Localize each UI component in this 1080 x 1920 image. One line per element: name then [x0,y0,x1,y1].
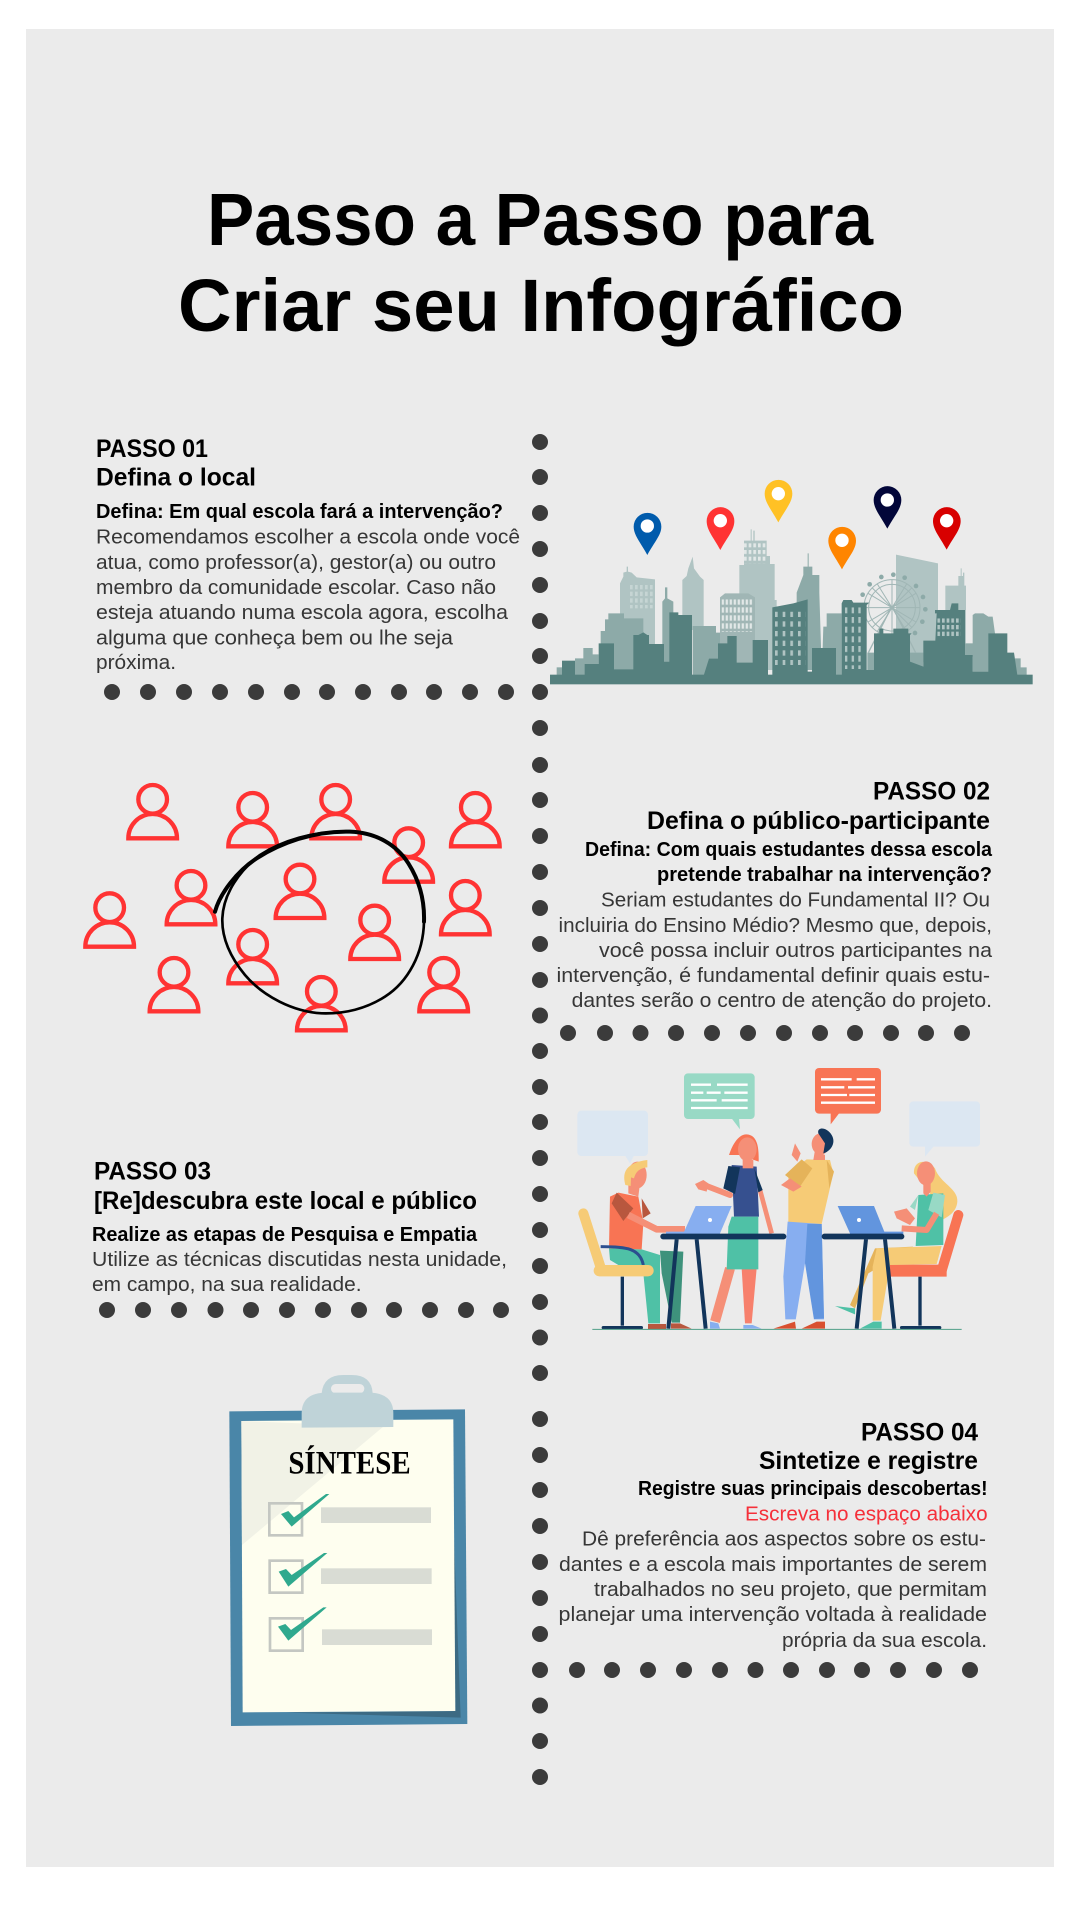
checklist item 2 [270,1553,432,1593]
panel: passo 02 text: Defina: Com quais estudantes dessa escola [585,839,993,861]
panel: passo 01 text: atua, como professor(a), gestor(a) ou outro [96,552,496,574]
panel: passo 04 text: Dê preferência aos aspectos sobre os estu- [582,1529,986,1551]
panel: passo 01 text: membro da comunidade escolar. Caso não [96,577,496,599]
table with laptops [660,1206,904,1329]
checklist item 3 [270,1607,432,1651]
title: Passo a Passo para [207,178,874,261]
panel: passo 04 text: própria da sua escola. [782,1630,987,1652]
skyline middle layer [557,587,1027,679]
panel: passo 03 text: em campo, na sua realidade. [92,1274,362,1296]
map pin: blue [634,513,661,555]
checklist item 1 [269,1494,431,1535]
panel: passo 04 text: Sintetize e registre [759,1447,978,1475]
hand-drawn selection circle [215,832,424,1013]
illustration: team talking at a table [577,1068,980,1329]
paper sheet [241,1419,455,1712]
speech bubble: light left [577,1111,648,1163]
clipboard board [229,1409,467,1726]
panel: passo 02 text: pretende trabalhar na intervenção? [657,864,992,886]
panel: passo 04 text: Registre suas principais descobertas! [638,1478,988,1500]
speech bubble: coral [815,1068,881,1124]
map pin: red [707,507,734,550]
dotted divider: passo 03 [99,1302,509,1318]
speech bubble: green [684,1073,755,1129]
illustration: city skyline with map pins [550,480,1033,684]
person: standing man looking up [773,1129,834,1329]
panel: passo 02 text: PASSO 02 [873,778,990,806]
panel: passo 01 text: PASSO 01 [96,435,208,463]
panel: passo 02 text: intervenção, é fundamental definir quais estu- [556,965,990,987]
panel: passo 01 text: Defina: Em qual escola fará a intervenção? [96,501,503,523]
skyline near layer [550,599,1033,684]
illustration: crowd of people with hand-drawn circle [85,785,500,1030]
panel: passo 03 text: PASSO 03 [94,1158,211,1186]
person: seated man left with chair [583,1160,692,1329]
title [178,178,904,347]
panel: passo 02 text [556,778,993,1012]
heading: síntese: SÍNTESE [288,1444,411,1480]
map pin: yellow [765,480,792,522]
map pin: navy [874,486,901,529]
dotted divider: passo 04 [569,1662,978,1678]
clip [302,1375,393,1428]
panel: passo 03 text: [Re]descubra este local e público [94,1187,477,1215]
paper shadow [287,1520,461,1718]
illustration: clipboard síntese [229,1375,467,1726]
person: seated woman right with chair [835,1161,958,1329]
panel: passo 01 text [96,435,520,674]
panel: passo 03 text: Realize as etapas de Pesquisa e Empatia [92,1224,478,1246]
panel: passo 04 text: dantes e a escola mais importantes de serem [559,1554,987,1576]
map pin: orange [828,527,856,569]
paper highlight [241,1421,383,1545]
panel: passo 04 text: planejar uma intervenção voltada à realidade [558,1604,987,1626]
panel: passo 02 text: dantes serão o centro de atenção do projeto. [572,990,992,1012]
map pin: crimson [933,507,961,550]
skyline far layer [620,529,966,670]
panel: passo 03 text [92,1158,507,1296]
panel: passo 01 text: alguma que conheça bem ou lhe seja [96,628,454,650]
panel: passo 02 text: incluiria do Ensino Médio? Mesmo que, depois, [558,915,992,937]
vertical dotted timeline [532,434,548,1785]
panel: passo 04 text [558,1419,988,1652]
panel: passo 02 text: Defina o público-participante [647,807,990,835]
dotted divider: passo 01 [104,684,514,700]
panel: passo 04 text: trabalhados no seu projeto, que permitam [594,1579,987,1601]
panel: passo 02 text: você possa incluir outros participantes na [599,940,993,962]
person: standing woman [695,1134,772,1329]
title: Criar seu Infográfico [178,264,904,347]
dotted divider: passo 02 [560,1025,970,1041]
panel: passo 04 text: Escreva no espaço abaixo [745,1504,988,1526]
panel: passo 03 text: Utilize as técnicas discutidas nesta unidade, [92,1249,507,1271]
ferris wheel [860,572,928,653]
panel: passo 01 text: próxima. [96,652,176,674]
panel: passo 01 text: Recomendamos escolher a escola onde você [96,527,520,549]
panel: passo 01 text: Defina o local [96,464,256,492]
panel: passo 04 text: PASSO 04 [861,1419,978,1447]
ground line [592,1328,962,1331]
speech bubble: light right [909,1101,980,1157]
panel: passo 02 text: Seriam estudantes do Fundamental II? Ou [601,890,990,912]
panel: passo 01 text: esteja atuando numa escola agora, escolha [96,602,509,624]
